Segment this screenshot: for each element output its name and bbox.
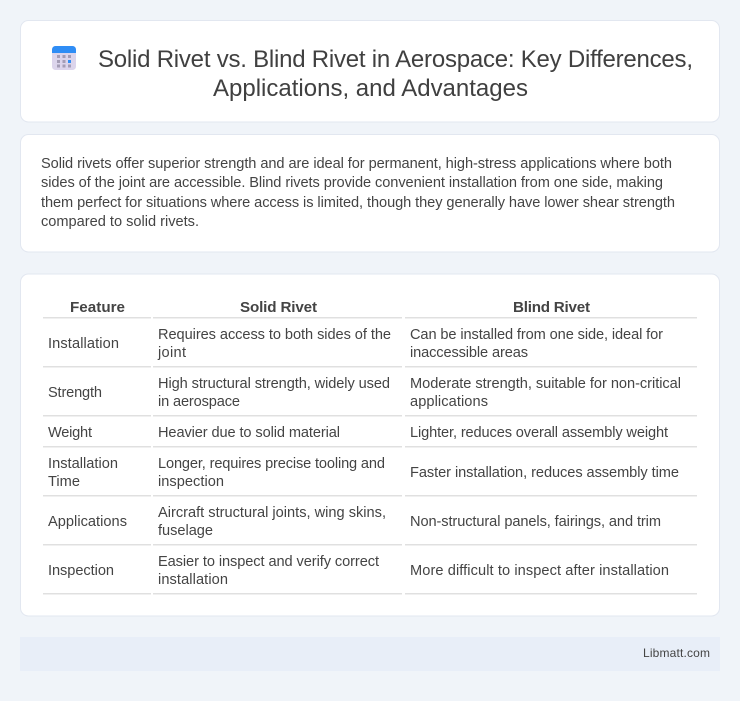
footer brand: Libmatt.com (643, 646, 710, 660)
row: installation: Installation (48, 336, 119, 352)
text block: summary paragraph: compared to solid rivets. (41, 214, 199, 230)
footer (20, 637, 720, 671)
table header (70, 299, 590, 316)
row: installation time: Installation (48, 456, 118, 472)
row: weight: Heavier due to solid material (158, 425, 340, 441)
table header: Blind Rivet (513, 299, 590, 316)
row: installation time: Longer, requires precise tooling and (158, 456, 385, 472)
row: installation time (48, 456, 679, 490)
table header: Feature (70, 299, 125, 316)
row: strength: in aerospace (158, 394, 240, 410)
row: strength: applications (410, 394, 488, 410)
text block: summary paragraph: them perfect for situations where access is limited, though they generally have lower shear strength (41, 195, 675, 211)
title: Applications, and Advantages (213, 75, 528, 102)
table header: Solid Rivet (240, 299, 317, 316)
text block: summary paragraph: sides of the joint are accessible. Blind rivets provide convenient installation from one side, making (41, 175, 663, 191)
table rules (43, 317, 697, 594)
row: weight (48, 425, 668, 441)
row: inspection (48, 554, 669, 588)
row: inspection: Inspection (48, 563, 114, 579)
row: strength: High structural strength, widely used (158, 376, 390, 392)
row: installation time: inspection (158, 474, 224, 490)
row: installation time: Time (48, 474, 80, 490)
row: applications: fuselage (158, 523, 213, 539)
row: weight: Lighter, reduces overall assembly weight (410, 425, 668, 441)
row: applications: Non-structural panels, fairings, and trim (410, 514, 661, 530)
title: Solid Rivet vs. Blind Rivet in Aerospace: Key Differences, (98, 46, 693, 73)
title (98, 46, 693, 102)
row: installation (48, 327, 663, 361)
panel: introduction (20, 134, 720, 252)
row: inspection: installation (158, 572, 228, 588)
icon: calendar (52, 46, 76, 70)
row: installation: inaccessible areas (410, 345, 528, 361)
row: applications: Aircraft structural joints, wing skins, (158, 505, 386, 521)
text block: summary paragraph (41, 156, 675, 230)
row: applications (48, 505, 661, 539)
row: installation: Requires access to both sides of the (158, 327, 391, 343)
panel: comparison table (20, 274, 720, 616)
row: applications: Applications (48, 514, 127, 530)
row: strength (48, 376, 681, 410)
row: installation time: Faster installation, reduces assembly time (410, 465, 679, 481)
row: installation: Can be installed from one side, ideal for (410, 327, 663, 343)
row: inspection: Easier to inspect and verify correct (158, 554, 379, 570)
panel: title card (20, 20, 720, 122)
row: inspection: More difficult to inspect after installation (410, 563, 669, 579)
row: installation: joint (157, 345, 186, 361)
text block: summary paragraph: Solid rivets offer superior strength and are ideal for permanent, high-stress applications where both (41, 156, 672, 172)
row: weight: Weight (48, 425, 92, 441)
row: strength: Strength (48, 385, 102, 401)
row: strength: Moderate strength, suitable for non-critical (410, 376, 681, 392)
